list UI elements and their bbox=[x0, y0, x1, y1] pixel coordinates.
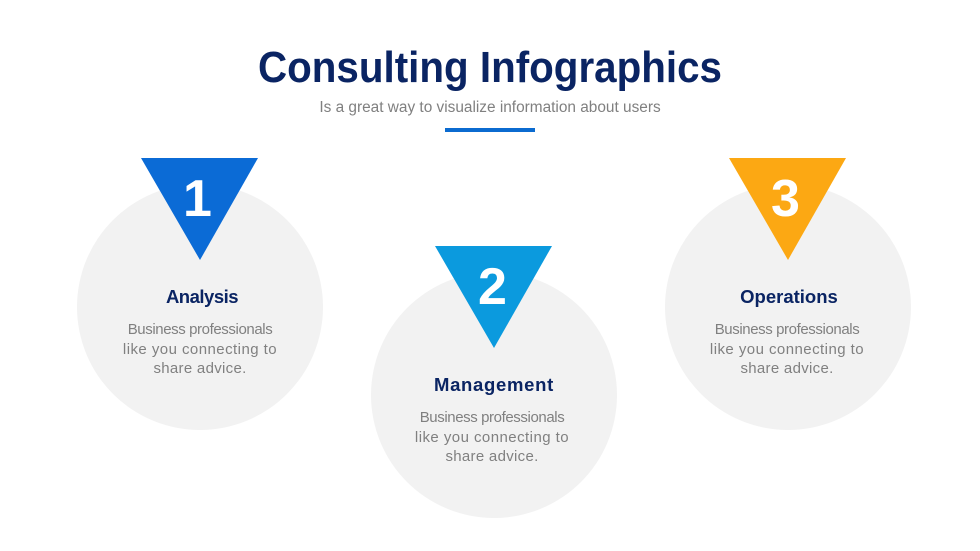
description: share advice. bbox=[153, 360, 247, 377]
triangle badge 1 bbox=[141, 158, 258, 260]
subtitle: Is a great way to visualize information about users bbox=[319, 99, 661, 116]
triangle badge 2 bbox=[435, 246, 552, 348]
description: Business professionals bbox=[128, 321, 272, 338]
title underline bbox=[445, 128, 535, 132]
triangle badge 3 bbox=[729, 158, 846, 260]
panel: management bbox=[371, 246, 617, 518]
background circle bbox=[665, 184, 911, 430]
title: Consulting Infographics bbox=[258, 43, 722, 92]
background circle bbox=[77, 184, 323, 430]
description bbox=[415, 409, 569, 465]
panel: analysis bbox=[77, 158, 323, 430]
description: like you connecting to bbox=[123, 340, 277, 358]
description: Business professionals bbox=[715, 321, 859, 338]
background circle bbox=[371, 272, 617, 518]
description: like you connecting to bbox=[415, 428, 569, 446]
number 3: 3 bbox=[771, 170, 800, 228]
description: share advice. bbox=[740, 360, 834, 377]
description bbox=[123, 321, 277, 377]
number 2: 2 bbox=[478, 258, 507, 316]
number 1: 1 bbox=[183, 170, 212, 228]
heading: Analysis bbox=[166, 286, 238, 307]
heading: Operations bbox=[740, 286, 838, 307]
description: share advice. bbox=[445, 448, 539, 465]
heading: Management bbox=[434, 374, 554, 395]
description bbox=[710, 321, 864, 377]
description: Business professionals bbox=[420, 409, 564, 426]
description: like you connecting to bbox=[710, 340, 864, 358]
panel: operations bbox=[665, 158, 911, 430]
